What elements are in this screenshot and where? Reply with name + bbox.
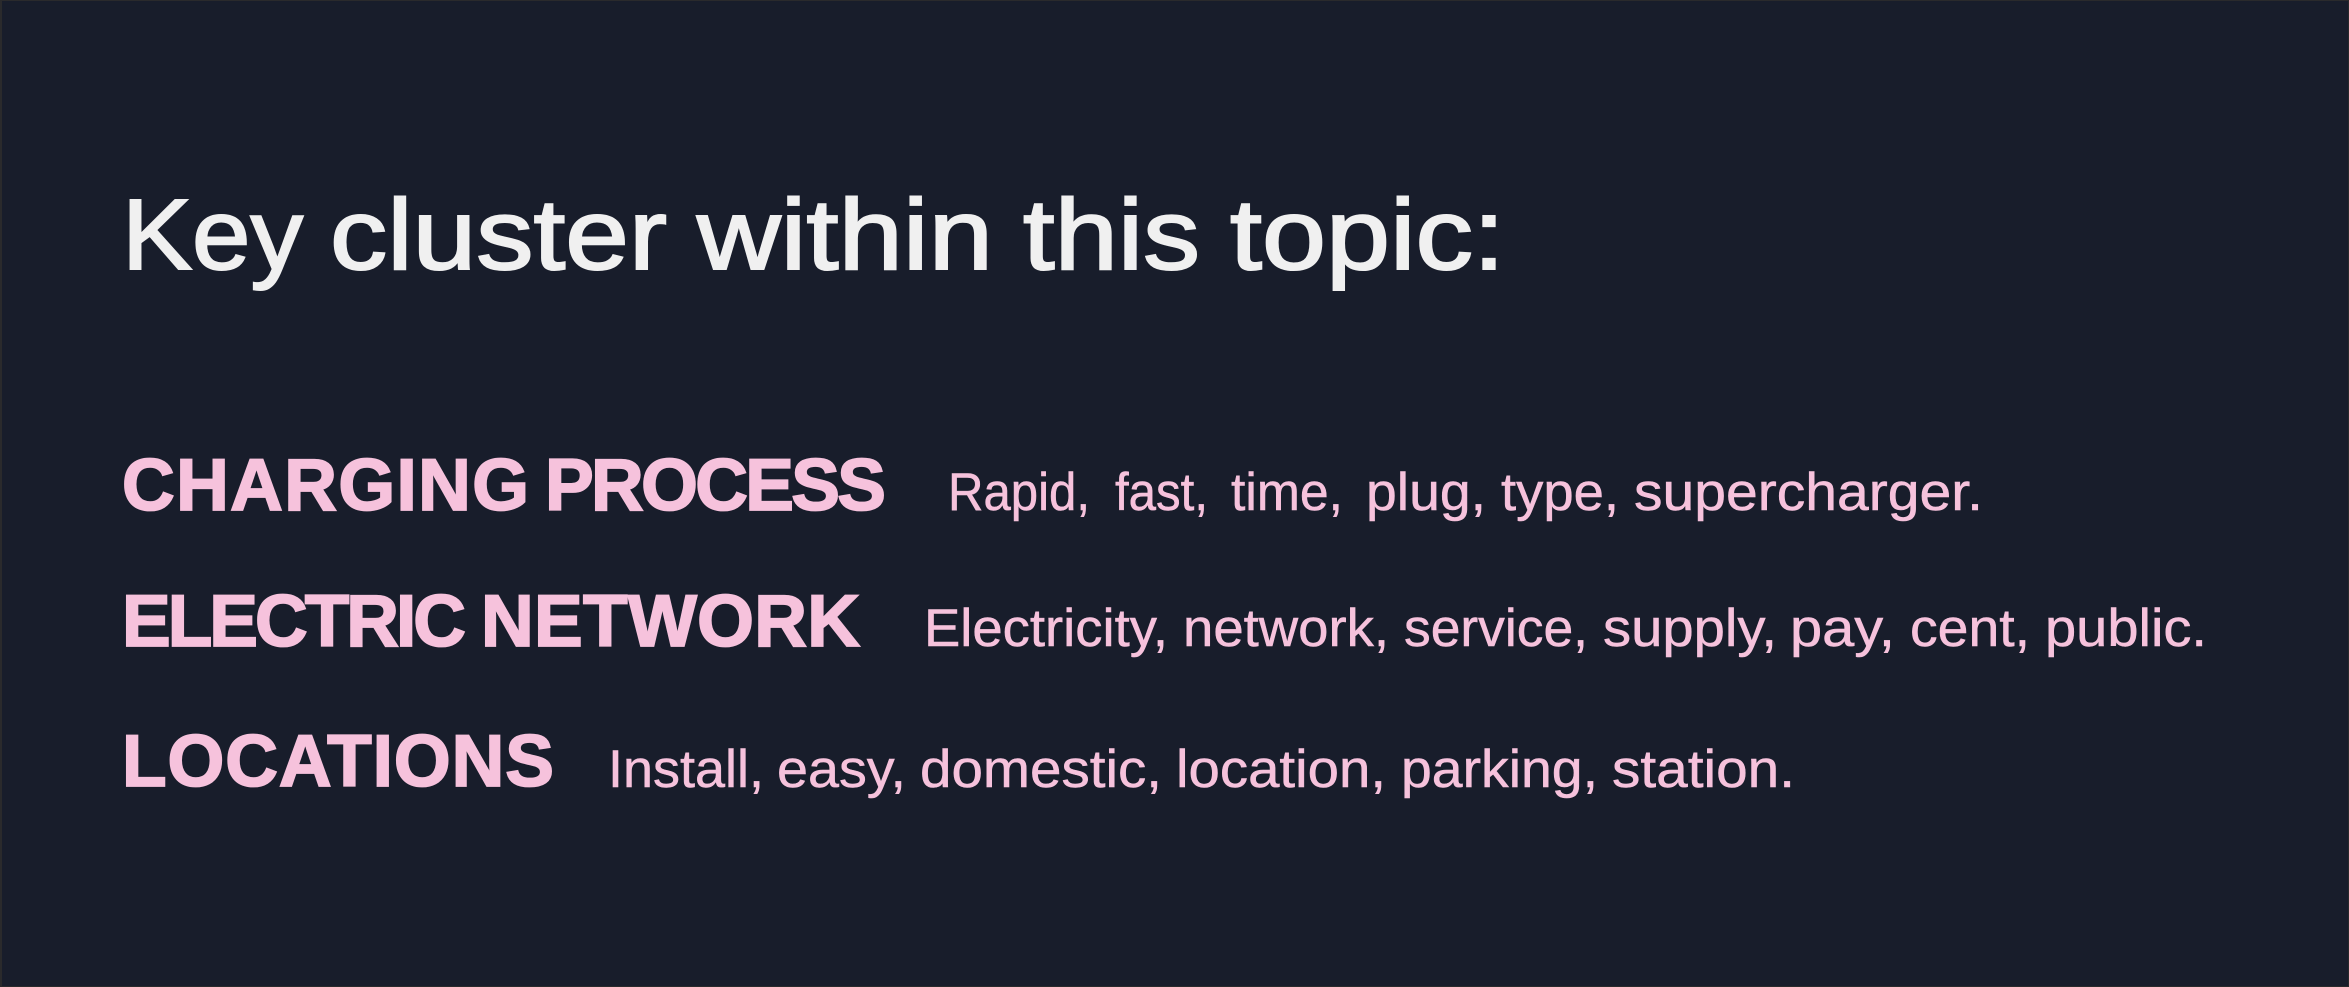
text: locations keywords: parking, (1401, 740, 1598, 799)
heading: locations: LOCATIONS (122, 721, 554, 802)
text: electric network keywords: service, (1404, 599, 1588, 658)
heading: electric network: NETWORK (481, 581, 860, 662)
text: locations keywords: location, (1176, 740, 1386, 799)
title: this (1023, 179, 1200, 291)
text: charging process keywords: supercharger. (1634, 463, 1983, 522)
title: Key (122, 179, 303, 291)
text: charging process keywords: time, (1231, 463, 1343, 522)
text: charging process keywords: plug, (1366, 463, 1486, 522)
heading: charging process: CHARGING (122, 445, 529, 526)
text: electric network keywords: supply, (1603, 599, 1777, 658)
text: charging process keywords: fast, (1115, 463, 1208, 522)
text: charging process keywords: Rapid, (948, 463, 1090, 522)
text: locations keywords: easy, (777, 740, 906, 799)
title: topic: (1230, 179, 1505, 291)
text: locations keywords: domestic, (920, 740, 1162, 799)
text: locations keywords: station. (1612, 740, 1795, 799)
text: charging process keywords: type, (1501, 463, 1619, 522)
text: locations keywords: Install, (608, 740, 764, 799)
text: electric network keywords: network, (1183, 599, 1389, 658)
cluster row: charging process (122, 445, 1983, 526)
cluster row: electric network (122, 581, 2207, 662)
text: electric network keywords: cent, (1910, 599, 2030, 658)
text: electric network keywords: pay, (1790, 599, 1895, 658)
heading: charging process: PROCESS (545, 445, 886, 526)
title: cluster (330, 179, 667, 291)
title: within (696, 179, 993, 291)
text: electric network keywords: public. (2045, 599, 2207, 658)
cluster row: locations (122, 721, 1795, 802)
heading: electric network: ELECTRIC (122, 581, 466, 662)
text: electric network keywords: Electricity, (924, 599, 1168, 658)
